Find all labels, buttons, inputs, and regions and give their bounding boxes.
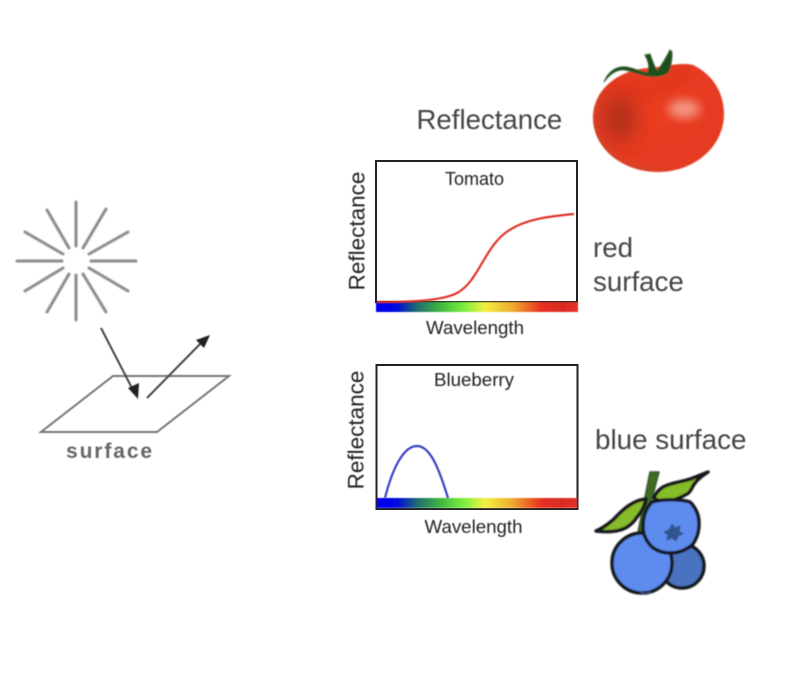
panel: tomato chart bbox=[344, 161, 578, 338]
spectrum bar bbox=[376, 302, 578, 312]
panel: light reflecting from a surface bbox=[17, 202, 229, 463]
x-axis label: Wavelength bbox=[424, 516, 522, 537]
label: red surface: surface bbox=[593, 266, 684, 297]
label: red surface: red bbox=[593, 232, 633, 263]
heading: Reflectance: Reflectance bbox=[416, 104, 562, 135]
chart frame bbox=[376, 161, 577, 302]
chart title: Blueberry: Blueberry bbox=[434, 369, 515, 390]
panel: blueberry chart bbox=[344, 365, 578, 537]
icon: sun bbox=[17, 202, 136, 320]
tomato reflectance curve bbox=[377, 214, 574, 302]
x-axis label: Wavelength bbox=[426, 317, 524, 338]
infographic canvas bbox=[14, 48, 746, 596]
spectrum bar bbox=[377, 498, 577, 508]
label: blue surface: blue surface bbox=[595, 424, 746, 455]
icon: blueberries bbox=[596, 472, 708, 594]
label: surface: surface bbox=[66, 440, 154, 463]
chart frame bbox=[376, 365, 578, 509]
arrow: incoming light bbox=[101, 328, 139, 399]
icon: tomato bbox=[593, 50, 724, 172]
y-axis label: Reflectance bbox=[344, 172, 370, 290]
arrow: reflected light bbox=[147, 335, 210, 398]
blueberry reflectance curve bbox=[385, 446, 448, 498]
y-axis label: Reflectance bbox=[344, 371, 368, 489]
icon: surface plane bbox=[41, 376, 229, 432]
chart title: Tomato: Tomato bbox=[445, 169, 504, 189]
